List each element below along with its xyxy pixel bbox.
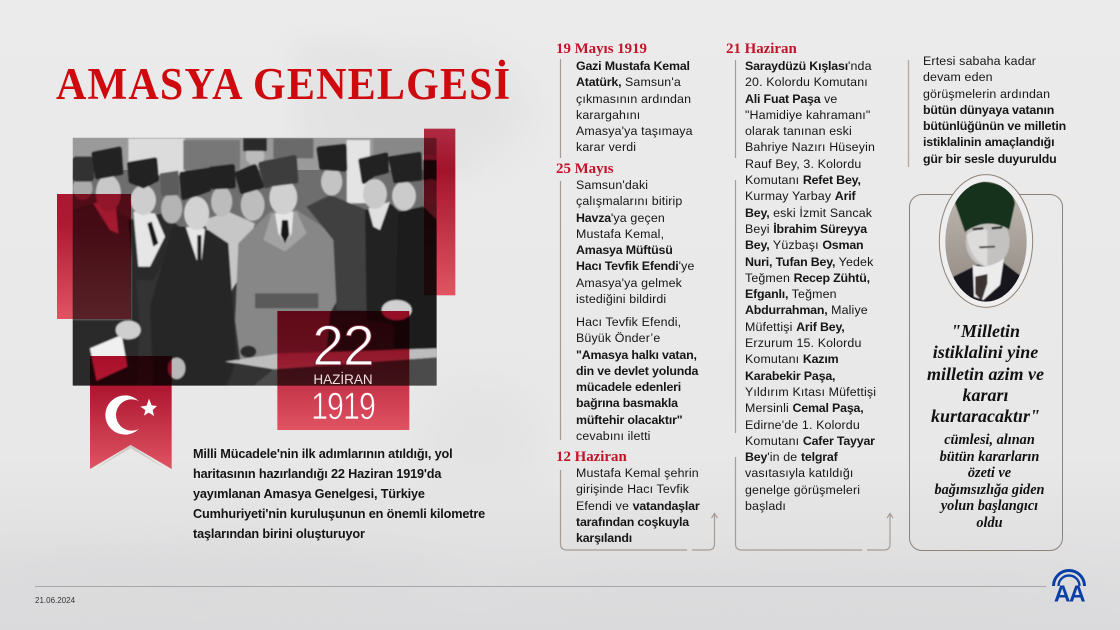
quote text — [927, 321, 1045, 531]
table — [225, 348, 437, 369]
footer rule — [35, 586, 1046, 587]
icon: crescent and star — [105, 395, 157, 435]
right men — [307, 195, 370, 310]
day number: 22 — [312, 314, 374, 378]
quote panel frame — [909, 194, 1063, 551]
month label: HAZİRAN — [313, 372, 373, 387]
flag ribbon emblem — [96, 395, 164, 468]
paper and hands — [90, 335, 127, 381]
ribbon notch shadow — [95, 445, 166, 469]
text: reply of Hacı Tevfik: Hacı Tevfik Efendi, Büyük Önder’e "Amasya halkı vatan, din ve devlet yolunda mücadele edenleri bağrına basmakla müftehir olacaktır" cevabını iletti — [576, 315, 698, 443]
photo: group portrait — [72, 137, 437, 386]
Ataturk greatcoat — [235, 210, 345, 360]
intro paragraph: Milli Mücadele'nin ilk adımlarının atıldığı, yol haritasının hazırlandığı 22 Haziran 1919'da yayımlanan Amasya Genelgesi, Türkiye Cumhuriyeti'nin kuruluşunun en önemli kilometre taşlarından birini oluşturuyor — [193, 447, 485, 541]
sub text: cümlesi, alınan bütün kararların özeti ve bağımsızlığa giden yolun başlangıcı oldu — [934, 432, 1045, 531]
column 2 timeline — [726, 41, 876, 513]
title: AMASYA GENELGESİ — [56, 60, 511, 110]
footer date: 21.06.2024 — [35, 596, 75, 605]
heading: 19 Mayıs 1919: 19 Mayıs 1919 — [556, 41, 647, 57]
left man — [72, 202, 140, 386]
icon: AA logo — [1052, 569, 1086, 604]
text: 25 Mayıs: Samsun'daki çalışmalarını bitirip Havza'ya geçen Mustafa Kemal, Amasya Müftüsü Hacı Tevfik Efendi'ye Amasya'ya gelmek istediğini bildirdi — [576, 178, 694, 306]
text: 12 Haziran: Mustafa Kemal şehrin girişinde Hacı Tevfik Efendi ve vatandaşlar tarafından coşkuyla karşılandı — [576, 466, 700, 545]
second man dark suit — [150, 227, 237, 386]
main quote: "Milletin istiklalini yine milletin azim ve kararı kurtaracaktır" — [927, 321, 1044, 426]
date block text — [311, 314, 375, 428]
portrait oval — [938, 174, 1034, 308]
year: 1919 — [311, 386, 375, 428]
text: 21 Haziran: Saraydüzü Kışlası'nda 20. Kolordu Komutanı Ali Fuat Paşa ve "Hamidiye kahramanı" olarak tanınan eski Bahriye Nazırı Hüseyin Rauf Bey, 3. Kolordu Komutanı Refet Bey, Kurmay Yarbay Arif Bey, eski İzmit Sancak Beyi İbrahim Süreyya Bey, Yüzbaşı Osman Nuri, Tufan Bey, Yedek Teğmen Recep Zühtü, Efganlı, Teğmen Abdurrahman, Maliye Müfettişi Arif Bey, Erzurum 15. Kolordu Komutanı Kazım Karabekir Paşa, Yıldırım Kıtası Müfettişi Mersinli Cemal Paşa, Edirne'de 1. Kolordu Komutanı Cafer Tayyar Bey'in de telgraf vasıtasıyla katıldığı genelge görüşmeleri başladı — [745, 59, 876, 513]
back row faces and hats — [246, 147, 264, 165]
column 3 text: Ertesi sabaha kadar devam eden görüşmelerin ardından bütün dünyaya vatanın bütünlüğünün ve milletin istiklalinin amaçlandığı gür bir sesle duyuruldu — [923, 54, 1066, 166]
third man with white shirt — [128, 213, 183, 280]
text: 19 Mayıs: Gazi Mustafa Kemal Atatürk, Samsun'a çıkmasının ardından karargahını Amasya'ya taşımaya karar verdi — [576, 59, 693, 154]
red overlay rectangles and date block — [57, 128, 456, 469]
heading: 25 Mayıs: 25 Mayıs — [556, 161, 614, 177]
heading: 21 Haziran: 21 Haziran — [726, 41, 797, 57]
middle light coat man — [203, 212, 255, 293]
heading: 12 Haziran: 12 Haziran — [556, 449, 627, 465]
column 1 timeline — [556, 41, 700, 545]
